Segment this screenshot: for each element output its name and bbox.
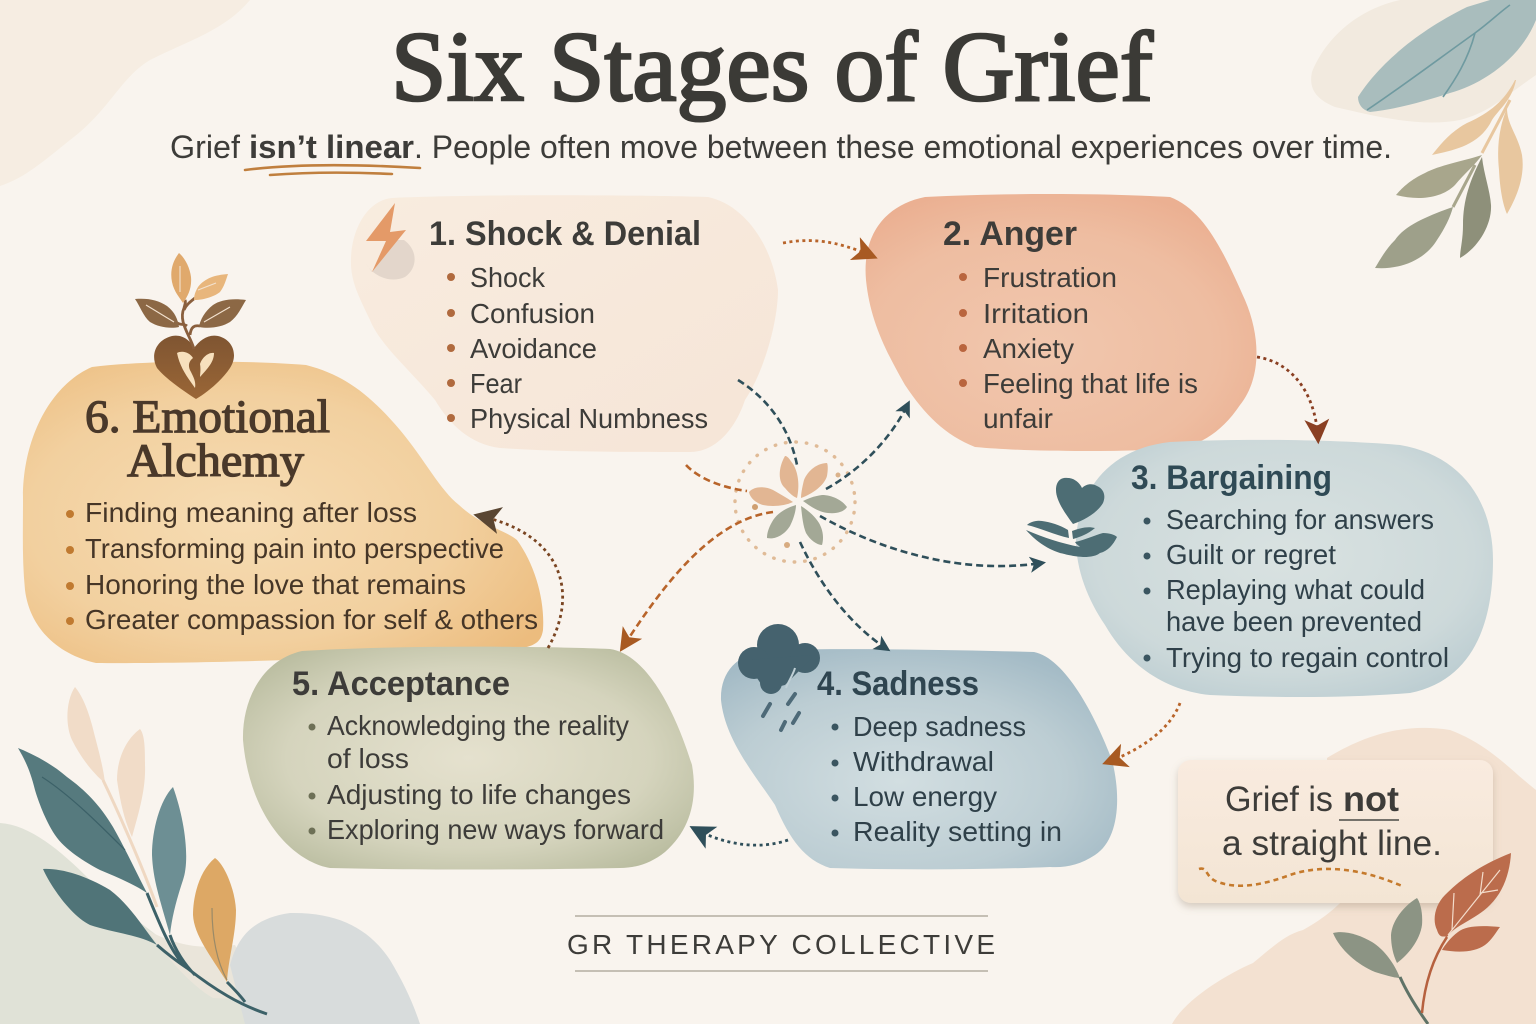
arrow: center to anger <box>826 404 908 489</box>
list: Physical Numbness <box>470 403 708 434</box>
panel: 2. Anger <box>866 194 1256 451</box>
list <box>832 711 1062 847</box>
callout: grief is not a straight line: a straight line. <box>1222 824 1442 863</box>
callout: grief is not a straight line <box>1178 760 1493 903</box>
heading: 1. Shock & Denial <box>429 215 701 253</box>
list: Withdrawal <box>853 746 994 777</box>
list: Low energy <box>853 781 997 812</box>
heading: 5. Acceptance <box>292 665 510 703</box>
arrow: stage 3 to stage 4 <box>1108 703 1180 762</box>
heading: 2. Anger <box>943 215 1077 253</box>
list: unfair <box>983 403 1053 434</box>
list: Honoring the love that remains <box>85 569 466 600</box>
list <box>66 497 538 635</box>
callout: grief is not a straight line: not <box>1343 780 1399 819</box>
list: Guilt or regret <box>1166 539 1336 570</box>
heading: 4. Sadness <box>817 665 979 703</box>
decoration: top right leaves <box>1358 0 1536 268</box>
list: of loss <box>327 743 409 774</box>
list <box>308 710 664 845</box>
footer brand: GR THERAPY COLLECTIVE <box>567 929 995 960</box>
panel: 5. Acceptance <box>243 647 694 870</box>
list: Searching for answers <box>1166 504 1434 535</box>
list <box>1144 504 1449 673</box>
list: Irritation <box>983 298 1089 329</box>
icon: heart in hand <box>1026 478 1117 557</box>
list: Fear <box>470 368 522 399</box>
subtitle <box>170 129 1392 175</box>
list: Frustration <box>983 262 1117 293</box>
arrow: stage 5 to stage 6 <box>480 516 563 648</box>
list: Acknowledging the reality <box>327 710 629 741</box>
list: have been prevented <box>1166 606 1422 637</box>
list: Confusion <box>470 298 595 329</box>
footer brand <box>567 916 995 971</box>
icon: rain cloud <box>738 624 820 730</box>
list <box>959 262 1198 434</box>
panel: 4. Sadness <box>721 624 1117 869</box>
center flower <box>735 442 855 562</box>
panel: 3. Bargaining <box>1026 440 1493 697</box>
list: Reality setting in <box>853 816 1062 847</box>
heading: Alchemy <box>127 435 305 487</box>
subtitle: Grief <box>170 129 240 165</box>
list: Replaying what could <box>1166 574 1425 605</box>
list: Greater compassion for self & others <box>85 604 538 635</box>
icon: heart with sprout <box>135 253 246 399</box>
list <box>447 262 708 434</box>
arrow: from center orange <box>686 465 747 491</box>
arrow: stage 4 to stage 5 <box>695 829 788 845</box>
panel: 1. Shock & Denial <box>351 195 778 452</box>
list: Anxiety <box>983 333 1074 364</box>
callout: grief is not a straight line: Grief is <box>1225 780 1333 819</box>
list: Finding meaning after loss <box>85 497 417 528</box>
heading: 6. Emotional <box>85 391 330 443</box>
list: Feeling that life is <box>983 368 1198 399</box>
decoration: bottom left leaves <box>18 687 267 1014</box>
subtitle: isn’t linear <box>249 129 414 165</box>
arrow: center to stage 1 <box>738 380 797 465</box>
list: Deep sadness <box>853 711 1026 742</box>
arrow: stage 2 to stage 3 <box>1257 357 1318 438</box>
arrow: stage 1 to stage 2 <box>783 241 872 256</box>
list: Transforming pain into perspective <box>85 533 504 564</box>
list: Trying to regain control <box>1166 642 1449 673</box>
subtitle: . People often move between these emotional experiences over time. <box>414 129 1392 165</box>
list: Exploring new ways forward <box>327 814 664 845</box>
panel: 6. Emotional Alchemy <box>23 253 543 663</box>
list: Shock <box>470 262 546 293</box>
list: Adjusting to life changes <box>327 779 631 810</box>
arrow: center to sadness <box>800 542 887 649</box>
title: Six Stages of Grief <box>391 11 1154 122</box>
list: Avoidance <box>470 333 597 364</box>
icon: lightning bolt <box>366 203 415 279</box>
arrow: center to acceptance <box>623 512 773 647</box>
heading <box>85 391 330 487</box>
decoration: bottom right leaves <box>1333 853 1511 1024</box>
arrow: center to bargaining <box>820 516 1042 566</box>
heading: 3. Bargaining <box>1131 459 1332 497</box>
